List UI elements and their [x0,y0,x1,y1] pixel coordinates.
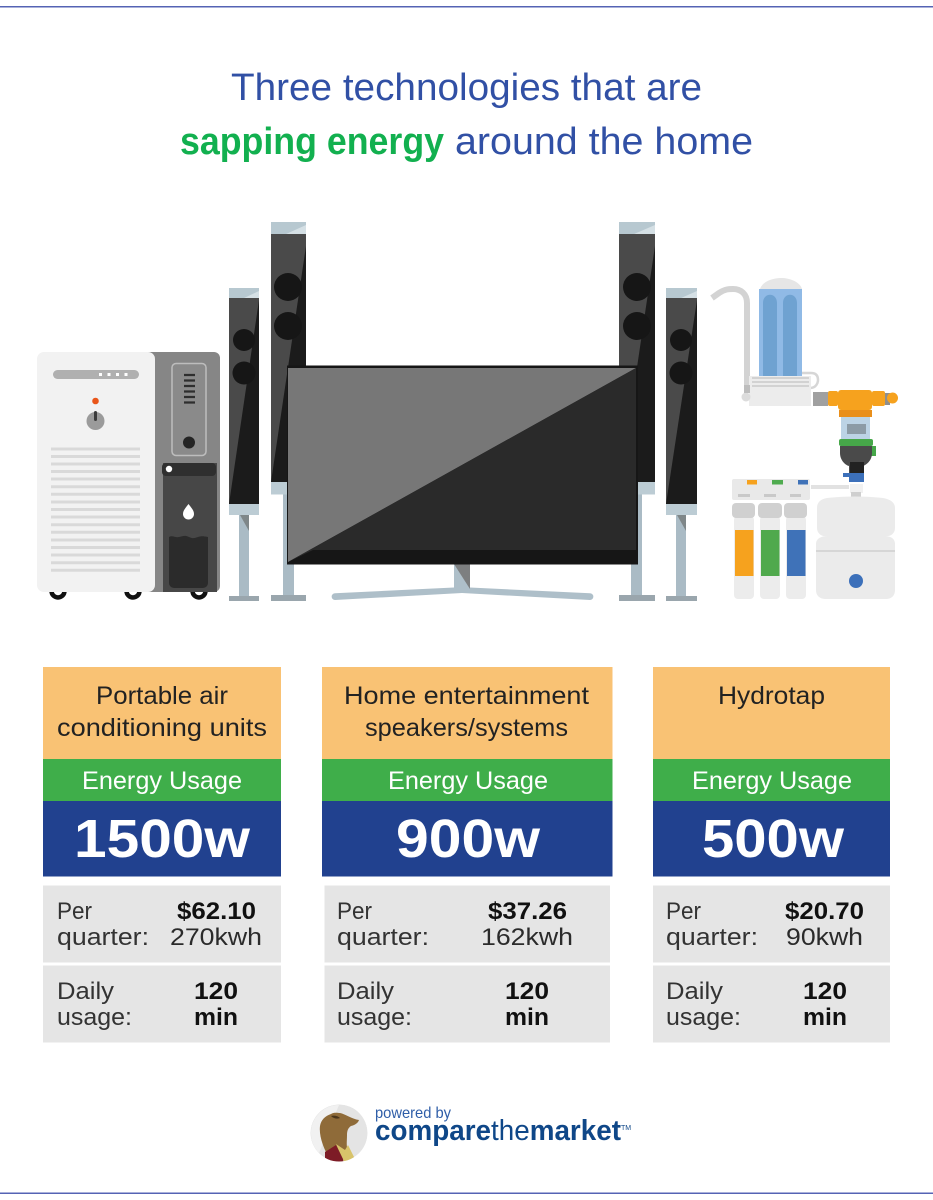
wattage [43,801,281,876]
per quarter row: Per [57,898,92,925]
filter base [742,373,818,406]
daily usage row: 120 [194,978,238,1005]
wattage: 900w [396,809,541,869]
speaker: far right [666,288,697,601]
illustration: home entertainment system [229,222,697,601]
per quarter row: quarter: [337,924,429,951]
daily usage row [324,966,610,1042]
title highlight: sapping energy: sapping energy [180,121,444,163]
daily usage row: usage: [337,1004,412,1031]
card name: Hydrotap [718,682,825,710]
title [180,67,753,163]
energy usage label: Energy Usage [692,767,852,795]
daily usage row [43,966,281,1042]
per quarter row: $37.26 [488,898,567,925]
daily usage row: 120 [803,978,847,1005]
daily usage row: min [803,1004,847,1031]
filter cartridge [759,278,802,376]
energy usage label: Energy Usage [82,767,242,795]
card: home entertainment speakers/systems [322,667,612,1042]
speaker: far left [229,288,259,601]
television stand [332,564,593,600]
card name [43,667,281,759]
three filter columns [732,479,810,599]
energy usage label [43,759,281,801]
illustration: hydrotap and filters [712,278,898,599]
daily usage row: Daily [666,978,723,1005]
water tank [162,463,217,592]
energy usage label [653,759,890,801]
dial [86,411,104,430]
per quarter row: $20.70 [785,898,864,925]
daily usage row: 120 [505,978,549,1005]
daily usage row: usage: [666,1004,741,1031]
card name [653,667,890,759]
wheels [52,584,206,598]
card: portable air conditioning units [43,667,281,1042]
blue connector [843,473,864,497]
card: hydrotap [653,667,890,1042]
per quarter row: Per [337,898,372,925]
daily usage row: min [505,1004,549,1031]
card name: Portable air [96,682,228,710]
per quarter row: 162kwh [481,924,573,951]
wattage [322,801,612,876]
control panel [172,364,206,456]
title remainder: around the home: around the home [455,121,753,163]
per quarter row [43,886,281,962]
daily usage row [653,966,890,1042]
per quarter row: 90kwh [786,924,863,951]
energy usage label: Energy Usage [388,767,548,795]
faucet spout [712,289,747,391]
logo: compare the market [310,1104,631,1165]
per quarter row: 270kwh [170,924,262,951]
daily usage row: usage: [57,1004,132,1031]
rear body [120,352,220,592]
logo text: powered by [375,1105,451,1122]
per quarter row [653,886,890,962]
storage tank [816,496,895,599]
card name: Home entertainment [344,682,589,710]
daily usage row: Daily [57,978,114,1005]
per quarter row: Per [666,898,701,925]
speaker: inner right [619,222,655,601]
icon: meerkat mascot [310,1104,368,1165]
logo text: TM [621,1125,631,1132]
per quarter row: quarter: [666,924,758,951]
strainer and green collar [839,417,876,473]
wattage: 500w [702,809,845,869]
television screen [287,366,638,564]
front white body [37,352,155,592]
illustration: portable air conditioner [37,352,220,598]
card name: speakers/systems [365,714,568,742]
wattage: 1500w [74,809,251,869]
wattage [653,801,890,876]
energy usage label [322,759,612,801]
daily usage row: Daily [337,978,394,1005]
daily usage row: min [194,1004,238,1031]
per quarter row: quarter: [57,924,149,951]
connecting tube [811,485,849,489]
vent slats [51,449,140,570]
orange valve [813,390,898,417]
card name [322,667,612,759]
per quarter row [324,886,610,962]
per quarter row: $62.10 [177,898,256,925]
speaker: inner left [271,222,306,601]
card name: conditioning units [57,714,267,742]
logo text: comparethemarket [375,1115,621,1147]
title: Three technologies that are [231,67,702,109]
